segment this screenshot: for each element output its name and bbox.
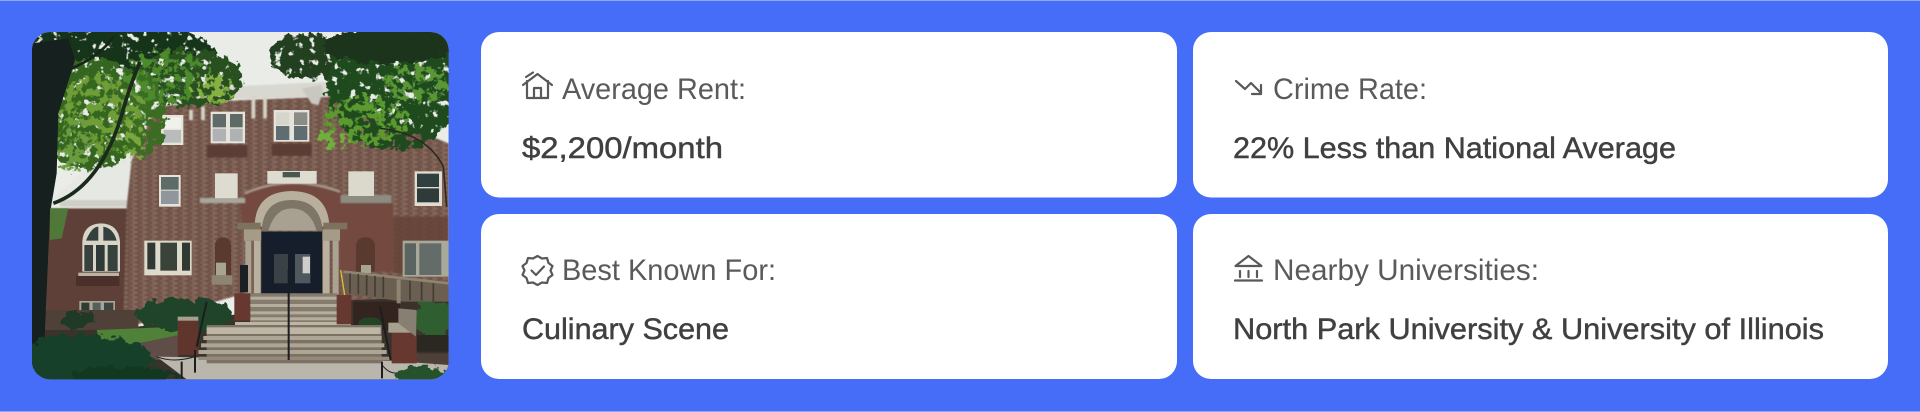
front stairs <box>157 270 417 378</box>
left tree foliage <box>32 32 245 175</box>
left tree trunk and branch <box>32 37 140 368</box>
card: Best Known For <box>481 214 1177 379</box>
icon: university building <box>1235 256 1262 280</box>
icon: verified badge <box>522 256 552 285</box>
photo: brick apartment building behind trees <box>32 32 449 380</box>
value: universities: North Park University & University of Illinois <box>1233 313 1824 346</box>
card: Nearby Universities <box>1193 214 1888 379</box>
wooden ramp railing <box>341 270 449 337</box>
label: Average Rent: Average Rent: <box>562 73 746 106</box>
planting beds and lawn <box>32 297 455 379</box>
walkway <box>157 357 449 379</box>
arched entrance <box>237 191 347 295</box>
icon: house <box>523 72 552 98</box>
value: rent: $2,200/month <box>522 132 723 165</box>
card: Crime Rate <box>1193 32 1888 198</box>
value: known for: Culinary Scene <box>522 313 729 346</box>
icon: trending down arrow <box>1236 81 1261 94</box>
label: Nearby Universities: Nearby Universities: <box>1273 254 1539 287</box>
right tree foliage <box>269 32 449 152</box>
label: Best Known For: Best Known For: <box>562 254 776 287</box>
windows <box>76 110 449 323</box>
card: Average Rent <box>481 32 1177 198</box>
value: crime rate: 22% Less than National Average <box>1233 132 1676 165</box>
right tree limb <box>380 128 447 207</box>
roof and eaves <box>53 82 333 207</box>
label: Crime Rate: Crime Rate: <box>1273 73 1427 106</box>
shrubs in foreground <box>32 332 446 380</box>
brick walls <box>45 85 449 328</box>
